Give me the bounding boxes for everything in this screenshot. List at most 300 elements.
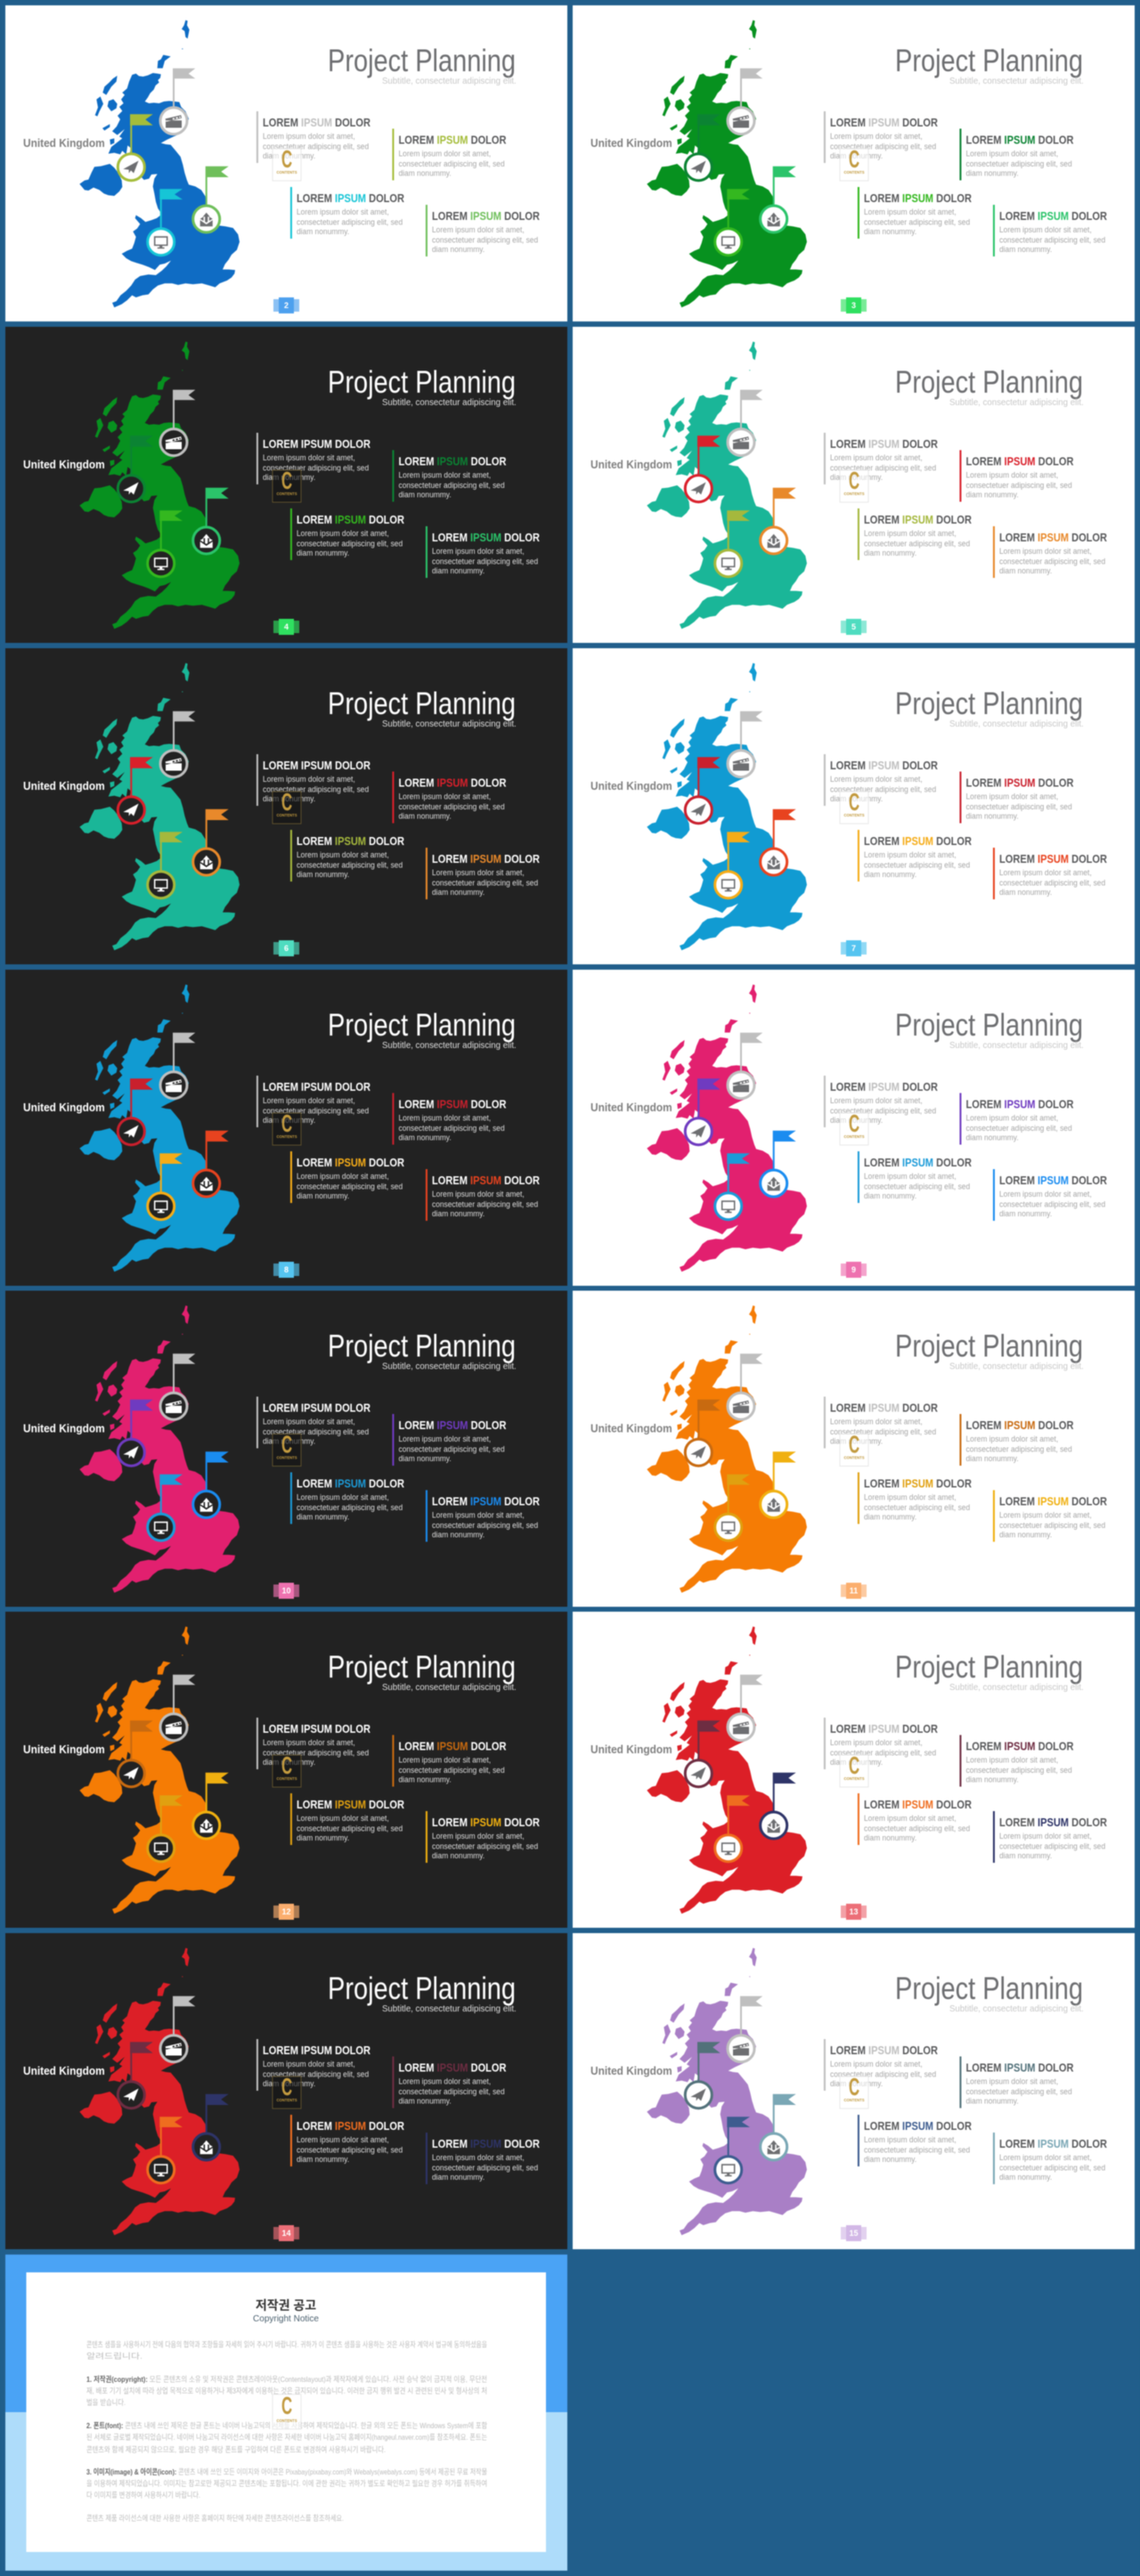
- map: United Kingdom: [79, 663, 240, 950]
- flag marker: monitor: [148, 832, 183, 898]
- map label: United Kingdom: [590, 137, 672, 150]
- text block 3: consectetuer adipiscing elit, sed: [297, 1182, 403, 1191]
- page number badge: [841, 619, 867, 635]
- map label: United Kingdom: [590, 1422, 672, 1435]
- flag marker: clapperboard: [728, 1353, 762, 1419]
- watermark logo: C: [849, 1430, 859, 1459]
- subtitle: Subtitle, consectetur adipiscing elit.: [949, 398, 1084, 408]
- text block 3: LOREM IPSUM DOLOR: [297, 513, 404, 526]
- flag marker: envelope: [761, 488, 796, 554]
- text block 3: [290, 187, 404, 239]
- watermark logo: CONTENTS: [276, 1776, 297, 1781]
- title: Project Planning: [328, 686, 516, 721]
- text block 4: diam nonummy.: [432, 1851, 484, 1860]
- text block 1: consectetuer adipiscing elit, sed: [830, 784, 936, 794]
- text block 3: [290, 1151, 404, 1203]
- map: United Kingdom: [79, 20, 240, 307]
- subtitle: Subtitle, consectetur adipiscing elit.: [949, 2004, 1084, 2014]
- text block 1: LOREM IPSUM DOLOR: [830, 1722, 938, 1735]
- watermark logo: CONTENTS: [276, 170, 297, 175]
- text block 3: Lorem ipsum dolor sit amet,: [297, 1814, 389, 1823]
- flag marker: envelope: [761, 2094, 796, 2160]
- watermark logo: C: [849, 788, 859, 816]
- text block 2: diam nonummy.: [399, 490, 452, 500]
- text block 3: consectetuer adipiscing elit, sed: [864, 1182, 970, 1191]
- text block 2: [392, 771, 507, 823]
- text block 2: [392, 1414, 507, 1466]
- text block 4: [426, 526, 540, 578]
- subtitle: Subtitle, consectetur adipiscing elit.: [949, 1041, 1084, 1051]
- text block 1: diam nonummy.: [830, 1758, 883, 1767]
- map label: United Kingdom: [590, 2065, 672, 2077]
- panel: slide 14 dark red: [5, 1933, 567, 2249]
- text block 4: [993, 848, 1107, 899]
- text block 2: diam nonummy.: [965, 1775, 1019, 1784]
- watermark logo: C: [281, 2073, 292, 2101]
- text block 1: consectetuer adipiscing elit, sed: [263, 784, 369, 794]
- text block 4: LOREM IPSUM DOLOR: [999, 1174, 1107, 1187]
- text block 1: LOREM IPSUM DOLOR: [830, 759, 938, 772]
- page number badge: 11: [850, 1587, 858, 1596]
- flag marker: paper plane: [685, 1720, 721, 1787]
- text block 3: LOREM IPSUM DOLOR: [297, 191, 404, 205]
- text block 1: consectetuer adipiscing elit, sed: [263, 1748, 369, 1758]
- text block 3: consectetuer adipiscing elit, sed: [297, 217, 403, 227]
- text block 1: LOREM IPSUM DOLOR: [263, 437, 370, 451]
- watermark logo: CONTENTS: [276, 1134, 297, 1139]
- flag marker: monitor: [715, 1795, 750, 1862]
- notice paragraph 2: font: 콘텐츠와 함께 제공되지 않으므로, 필요한 경우 해당 폰트를 구입하여 다른 폰트로 변경하여 사용하시기 바랍니다.: [86, 2445, 386, 2454]
- text block 3: LOREM IPSUM DOLOR: [297, 834, 404, 848]
- text block 2: LOREM IPSUM DOLOR: [965, 134, 1074, 147]
- notice closing line: 콘텐츠 제품 라이선스에 대한 사용한 사항은 홈페이지 하단에 자세한 콘텐츠라이선스를 참조하세요.: [86, 2514, 344, 2523]
- map: United Kingdom: [79, 1305, 240, 1593]
- page number badge: [841, 1904, 867, 1920]
- text block 1: Lorem ipsum dolor sit amet,: [830, 1738, 923, 1747]
- text block 2: consectetuer adipiscing elit, sed: [965, 1766, 1072, 1775]
- text block 4: diam nonummy.: [432, 1530, 484, 1540]
- flag marker: paper plane: [685, 2042, 721, 2109]
- page number badge: 5: [851, 622, 856, 631]
- text block 3: LOREM IPSUM DOLOR: [864, 1477, 972, 1491]
- title: Project Planning: [895, 43, 1083, 78]
- text block 1: consectetuer adipiscing elit, sed: [830, 1748, 936, 1758]
- page number badge: [841, 940, 867, 956]
- text block 2: consectetuer adipiscing elit, sed: [399, 481, 505, 490]
- text block 2: consectetuer adipiscing elit, sed: [399, 159, 505, 168]
- text block 1: [824, 1076, 938, 1127]
- text block 2: [959, 2057, 1074, 2109]
- text block 2: [959, 771, 1074, 823]
- text block 4: Lorem ipsum dolor sit amet,: [432, 868, 525, 877]
- text block 2: LOREM IPSUM DOLOR: [965, 1740, 1074, 1753]
- watermark logo: [273, 1109, 301, 1145]
- text block 1: LOREM IPSUM DOLOR: [263, 1080, 370, 1093]
- text block 1: consectetuer adipiscing elit, sed: [830, 1427, 936, 1436]
- text block 3: [858, 1793, 972, 1845]
- map label: United Kingdom: [590, 459, 672, 471]
- text block 4: Lorem ipsum dolor sit amet,: [432, 1832, 525, 1841]
- watermark logo: [840, 1751, 868, 1787]
- map label: United Kingdom: [590, 780, 672, 792]
- text block 3: [290, 830, 404, 882]
- text block 1: Lorem ipsum dolor sit amet,: [263, 1096, 355, 1105]
- text block 3: [290, 1473, 404, 1524]
- text block 3: Lorem ipsum dolor sit amet,: [864, 1172, 957, 1181]
- text block 4: consectetuer adipiscing elit, sed: [432, 1841, 538, 1851]
- page number badge: 3: [851, 301, 856, 310]
- flag marker: monitor: [715, 189, 750, 256]
- text block 2: Lorem ipsum dolor sit amet,: [965, 792, 1058, 801]
- text block 2: Lorem ipsum dolor sit amet,: [399, 2076, 491, 2086]
- text block 2: LOREM IPSUM DOLOR: [399, 134, 507, 147]
- text block 1: LOREM IPSUM DOLOR: [263, 2044, 370, 2057]
- watermark logo: [840, 788, 868, 824]
- text block 3: Lorem ipsum dolor sit amet,: [297, 1172, 389, 1181]
- flag marker: envelope: [193, 1131, 229, 1197]
- text block 2: Lorem ipsum dolor sit amet,: [965, 1434, 1058, 1443]
- flag marker: paper plane: [685, 1400, 721, 1466]
- page number badge: 7: [851, 944, 856, 953]
- text block 1: LOREM IPSUM DOLOR: [263, 1402, 370, 1415]
- text block 1: diam nonummy.: [830, 151, 883, 160]
- text block 3: diam nonummy.: [864, 1512, 916, 1522]
- text block 3: consectetuer adipiscing elit, sed: [297, 2145, 403, 2155]
- watermark logo: [273, 2073, 301, 2109]
- flag marker: paper plane: [118, 1400, 153, 1466]
- watermark logo: [840, 2073, 868, 2109]
- page number badge: [273, 1583, 299, 1599]
- flag marker: clapperboard: [728, 390, 762, 456]
- page number badge: 13: [849, 1907, 859, 1916]
- watermark logo: C: [849, 2073, 859, 2101]
- flag marker: envelope: [761, 1131, 796, 1197]
- text block 3: [290, 508, 404, 560]
- watermark logo: CONTENTS: [276, 813, 297, 817]
- text block 3: Lorem ipsum dolor sit amet,: [864, 1814, 957, 1823]
- text block 1: LOREM IPSUM DOLOR: [830, 437, 938, 451]
- watermark logo: C: [281, 788, 292, 816]
- text block 4: LOREM IPSUM DOLOR: [432, 1816, 540, 1829]
- flag marker: paper plane: [118, 2042, 153, 2109]
- page number badge: [273, 1262, 299, 1278]
- text block 4: LOREM IPSUM DOLOR: [432, 531, 540, 544]
- subtitle: Subtitle, consectetur adipiscing elit.: [949, 1683, 1084, 1693]
- text block 4: Lorem ipsum dolor sit amet,: [999, 225, 1092, 234]
- text block 4: LOREM IPSUM DOLOR: [432, 1495, 540, 1508]
- text block 1: consectetuer adipiscing elit, sed: [263, 463, 369, 473]
- text block 4: diam nonummy.: [999, 1530, 1052, 1540]
- text block 3: diam nonummy.: [864, 2155, 916, 2164]
- flag marker: envelope: [193, 488, 229, 554]
- watermark logo: C: [281, 467, 292, 494]
- text block 2: diam nonummy.: [399, 168, 452, 178]
- map: United Kingdom: [79, 1627, 240, 1914]
- text block 3: [858, 187, 972, 239]
- notice paragraph 3: image and icon: 3. 이미지(image) & 아이콘(icon): 콘텐츠 내에 쓰인 모든 이미지와 아이콘은 Pixabay(pixabay.com)와 Webalys(webalys.com) 등에서 제공된 무료 저작물: [86, 2467, 487, 2476]
- text block 1: consectetuer adipiscing elit, sed: [830, 2069, 936, 2079]
- text block 2: Lorem ipsum dolor sit amet,: [399, 1113, 491, 1123]
- flag marker: envelope: [761, 1451, 796, 1517]
- text block 1: [824, 1718, 938, 1769]
- notice paragraph 1: copyright: 재, 배포 기기 설치에 따라 상업 목적으로 이용하거나 제3자에게 이용하는 것은 금지되어 있습니다. 이러한 금지 행위 발견 시 관련된 민사 및 형사상의 처: [86, 2386, 487, 2395]
- text block 4: LOREM IPSUM DOLOR: [999, 209, 1107, 223]
- text block 3: Lorem ipsum dolor sit amet,: [297, 207, 389, 216]
- text block 2: consectetuer adipiscing elit, sed: [399, 1124, 505, 1133]
- flag marker: envelope: [193, 1773, 229, 1839]
- title: Project Planning: [895, 364, 1083, 400]
- text block 2: diam nonummy.: [399, 1454, 452, 1463]
- text block 2: Lorem ipsum dolor sit amet,: [399, 1755, 491, 1765]
- text block 4: Lorem ipsum dolor sit amet,: [999, 547, 1092, 556]
- watermark logo: C: [281, 145, 292, 173]
- text block 3: LOREM IPSUM DOLOR: [864, 834, 972, 848]
- text block 4: LOREM IPSUM DOLOR: [432, 209, 540, 223]
- subtitle: Subtitle, consectetur adipiscing elit.: [382, 719, 517, 729]
- text block 3: consectetuer adipiscing elit, sed: [297, 1824, 403, 1833]
- text block 1: diam nonummy.: [263, 1436, 315, 1446]
- map: United Kingdom: [647, 20, 807, 307]
- text block 3: LOREM IPSUM DOLOR: [297, 2119, 404, 2133]
- text block 4: [426, 1811, 540, 1863]
- text block 1: LOREM IPSUM DOLOR: [263, 1722, 370, 1735]
- flag marker: clapperboard: [728, 1033, 762, 1099]
- text block 2: LOREM IPSUM DOLOR: [965, 2061, 1074, 2075]
- text block 4: consectetuer adipiscing elit, sed: [999, 557, 1105, 566]
- watermark logo: [273, 145, 301, 181]
- subtitle: Subtitle, consectetur adipiscing elit.: [382, 77, 517, 86]
- text block 2: LOREM IPSUM DOLOR: [399, 776, 507, 790]
- text block 1: [256, 1396, 370, 1448]
- watermark logo: [273, 1751, 301, 1787]
- text block 1: diam nonummy.: [830, 2079, 883, 2088]
- flag marker: paper plane: [118, 1720, 153, 1787]
- flag marker: clapperboard: [160, 1033, 195, 1099]
- page number badge: [841, 1262, 867, 1278]
- text block 3: consectetuer adipiscing elit, sed: [864, 1503, 970, 1512]
- watermark logo: CONTENTS: [276, 492, 297, 496]
- text block 1: consectetuer adipiscing elit, sed: [263, 1106, 369, 1116]
- text block 4: [426, 2133, 540, 2184]
- text block 3: Lorem ipsum dolor sit amet,: [864, 207, 957, 216]
- text block 2: consectetuer adipiscing elit, sed: [399, 2087, 505, 2096]
- text block 1: diam nonummy.: [263, 1116, 315, 1125]
- flag marker: envelope: [761, 1773, 796, 1839]
- text block 1: consectetuer adipiscing elit, sed: [830, 142, 936, 151]
- text block 4: consectetuer adipiscing elit, sed: [999, 2163, 1105, 2173]
- page number badge: [273, 297, 299, 313]
- panel: slide 6 dark teal: [5, 648, 567, 964]
- text block 2: LOREM IPSUM DOLOR: [965, 1098, 1074, 1111]
- watermark logo: C: [849, 467, 859, 494]
- text block 2: Lorem ipsum dolor sit amet,: [399, 149, 491, 158]
- watermark logo: CONTENTS: [843, 1134, 865, 1139]
- notice paragraph 3: image and icon: 을 이용하여 제작되었습니다. 이미지는 참고로만 제공되고 콘텐츠에는 포함됩니다. 이에 관한 권리는 귀하가 별도로 확인하고 필요한 경우 허가를 취득하여: [86, 2479, 487, 2488]
- subtitle: Subtitle, consectetur adipiscing elit.: [382, 398, 517, 408]
- text block 2: LOREM IPSUM DOLOR: [399, 1418, 507, 1432]
- notice paragraph 1: copyright: [86, 2375, 487, 2407]
- title: Project Planning: [895, 1649, 1083, 1685]
- map: United Kingdom: [79, 985, 240, 1272]
- watermark logo: [273, 467, 301, 502]
- text block 1: Lorem ipsum dolor sit amet,: [830, 132, 923, 141]
- text block 4: Lorem ipsum dolor sit amet,: [999, 1510, 1092, 1520]
- text block 3: consectetuer adipiscing elit, sed: [864, 2145, 970, 2155]
- text block 3: consectetuer adipiscing elit, sed: [864, 539, 970, 549]
- text block 4: diam nonummy.: [999, 566, 1052, 575]
- text block 3: diam nonummy.: [297, 549, 349, 557]
- text block 4: LOREM IPSUM DOLOR: [432, 1174, 540, 1187]
- flag marker: monitor: [715, 832, 750, 898]
- text block 4: LOREM IPSUM DOLOR: [432, 2137, 540, 2150]
- watermark logo: CONTENTS: [276, 2098, 297, 2102]
- text block 4: [993, 2133, 1107, 2184]
- flag marker: monitor: [148, 189, 183, 256]
- panel: slide 3 light green: [573, 5, 1135, 321]
- watermark logo: [840, 467, 868, 502]
- watermark logo: CONTENTS: [843, 1455, 865, 1460]
- subtitle: Subtitle, consectetur adipiscing elit.: [382, 1041, 517, 1051]
- text block 2: Lorem ipsum dolor sit amet,: [965, 149, 1058, 158]
- text block 3: LOREM IPSUM DOLOR: [864, 2119, 972, 2133]
- panel: slide 7 light sky blue: [573, 648, 1135, 964]
- text block 2: [959, 1414, 1074, 1466]
- text block 2: [392, 451, 507, 502]
- text block 2: [392, 128, 507, 180]
- panel: slide 2 light blue: [5, 5, 567, 321]
- flag marker: envelope: [193, 2094, 229, 2160]
- panel: slide 9 light pink: [573, 970, 1135, 1286]
- flag marker: clapperboard: [160, 711, 195, 777]
- text block 3: Lorem ipsum dolor sit amet,: [864, 529, 957, 538]
- notice paragraph 2: font: [86, 2421, 487, 2454]
- text block 4: [426, 1169, 540, 1221]
- text block 3: diam nonummy.: [864, 870, 916, 879]
- flag marker: monitor: [148, 1153, 183, 1220]
- flag marker: monitor: [715, 2117, 750, 2183]
- page number badge: 9: [851, 1265, 856, 1274]
- flag marker: monitor: [148, 510, 183, 577]
- text block 3: consectetuer adipiscing elit, sed: [297, 860, 403, 870]
- text block 1: [824, 111, 938, 163]
- text block 4: consectetuer adipiscing elit, sed: [999, 235, 1105, 245]
- text block 4: [426, 205, 540, 256]
- text block 2: consectetuer adipiscing elit, sed: [965, 1444, 1072, 1454]
- page number badge: [273, 619, 299, 635]
- flag marker: clapperboard: [160, 390, 195, 456]
- text block 2: diam nonummy.: [965, 1133, 1019, 1142]
- title: Project Planning: [895, 1971, 1083, 2006]
- notice intro paragraph: 콘텐츠 샘플을 사용하시기 전에 다음의 협약과 조항들을 자세히 읽어 주시기 바랍니다. 귀하가 이 콘텐츠 샘플을 사용하는 것은 사용자 계약서 법규에 동의하셨음을: [86, 2340, 487, 2349]
- text block 4: Lorem ipsum dolor sit amet,: [432, 1190, 525, 1199]
- page number badge: [273, 1904, 299, 1920]
- text block 1: [824, 433, 938, 484]
- flag marker: clapperboard: [728, 1675, 762, 1741]
- text block 4: LOREM IPSUM DOLOR: [999, 2137, 1107, 2150]
- page number badge: 14: [281, 2229, 291, 2238]
- text block 2: LOREM IPSUM DOLOR: [399, 1098, 507, 1111]
- text block 1: Lorem ipsum dolor sit amet,: [263, 775, 355, 784]
- text block 3: diam nonummy.: [864, 227, 916, 236]
- text block 3: diam nonummy.: [864, 1833, 916, 1842]
- watermark logo: CONTENTS: [843, 170, 865, 175]
- text block 3: LOREM IPSUM DOLOR: [864, 191, 972, 205]
- watermark logo: [840, 1109, 868, 1145]
- text block 2: Lorem ipsum dolor sit amet,: [399, 792, 491, 801]
- text block 4: diam nonummy.: [432, 566, 484, 575]
- text block 1: [256, 754, 370, 806]
- panel: slide 15 light purple: [573, 1933, 1135, 2249]
- text block 2: diam nonummy.: [399, 1775, 452, 1784]
- text block 2: LOREM IPSUM DOLOR: [399, 2061, 507, 2075]
- text block 1: Lorem ipsum dolor sit amet,: [830, 1417, 923, 1426]
- text block 4: LOREM IPSUM DOLOR: [999, 852, 1107, 865]
- title: Project Planning: [328, 1971, 516, 2006]
- text block 2: diam nonummy.: [965, 2096, 1019, 2106]
- text block 2: Lorem ipsum dolor sit amet,: [399, 470, 491, 480]
- map: United Kingdom: [647, 1627, 807, 1914]
- flag marker: paper plane: [685, 435, 721, 502]
- flag marker: paper plane: [685, 1078, 721, 1145]
- flag marker: monitor: [148, 1795, 183, 1862]
- text block 1: Lorem ipsum dolor sit amet,: [263, 453, 355, 462]
- text block 2: Lorem ipsum dolor sit amet,: [965, 2076, 1058, 2086]
- flag marker: clapperboard: [728, 1996, 762, 2062]
- panel: slide 10 dark pink: [5, 1291, 567, 1606]
- text block 2: diam nonummy.: [965, 490, 1019, 500]
- text block 2: diam nonummy.: [965, 168, 1019, 178]
- map: United Kingdom: [79, 1948, 240, 2235]
- flag marker: clapperboard: [160, 1675, 195, 1741]
- text block 4: LOREM IPSUM DOLOR: [999, 1816, 1107, 1829]
- text block 4: [993, 526, 1107, 578]
- text block 3: diam nonummy.: [864, 1191, 916, 1200]
- text block 3: Lorem ipsum dolor sit amet,: [297, 2135, 389, 2144]
- text block 4: Lorem ipsum dolor sit amet,: [999, 1190, 1092, 1199]
- watermark logo: [273, 2392, 301, 2429]
- text block 2: consectetuer adipiscing elit, sed: [399, 802, 505, 811]
- text block 1: Lorem ipsum dolor sit amet,: [263, 1738, 355, 1747]
- text block 3: diam nonummy.: [297, 1512, 349, 1522]
- flag marker: monitor: [148, 2117, 183, 2183]
- panel: slide 8 dark sky blue: [5, 970, 567, 1286]
- text block 1: [824, 2039, 938, 2091]
- text block 3: [290, 1793, 404, 1845]
- notice paragraph 2: font: 된 서체로 글로벌 제작되었습니다. 네이버 나눔고딕 라이선스에 대한 사항은 자세한 네이버 나눔고딕 홈페이지(hangeul.naver.com)를 참조하세요. 폰트는: [86, 2433, 487, 2442]
- flag marker: envelope: [193, 167, 229, 232]
- text block 4: Lorem ipsum dolor sit amet,: [999, 1832, 1092, 1841]
- text block 1: diam nonummy.: [830, 1436, 883, 1446]
- text block 2: diam nonummy.: [965, 811, 1019, 821]
- text block 4: consectetuer adipiscing elit, sed: [432, 2163, 538, 2173]
- notice intro paragraph: [86, 2340, 487, 2361]
- text block 1: LOREM IPSUM DOLOR: [830, 1402, 938, 1415]
- watermark logo: C: [849, 1751, 859, 1779]
- text block 3: LOREM IPSUM DOLOR: [864, 1156, 972, 1169]
- flag marker: envelope: [761, 167, 796, 232]
- text block 2: consectetuer adipiscing elit, sed: [965, 802, 1072, 811]
- title: Project Planning: [895, 686, 1083, 721]
- flag marker: clapperboard: [728, 69, 762, 134]
- panel: slide 11 light orange: [573, 1291, 1135, 1606]
- text block 4: [993, 1169, 1107, 1221]
- text block 1: diam nonummy.: [830, 1116, 883, 1125]
- text block 1: [824, 754, 938, 806]
- text block 1: consectetuer adipiscing elit, sed: [263, 142, 369, 151]
- text block 1: Lorem ipsum dolor sit amet,: [830, 453, 923, 462]
- text block 1: consectetuer adipiscing elit, sed: [830, 463, 936, 473]
- map: United Kingdom: [647, 985, 807, 1272]
